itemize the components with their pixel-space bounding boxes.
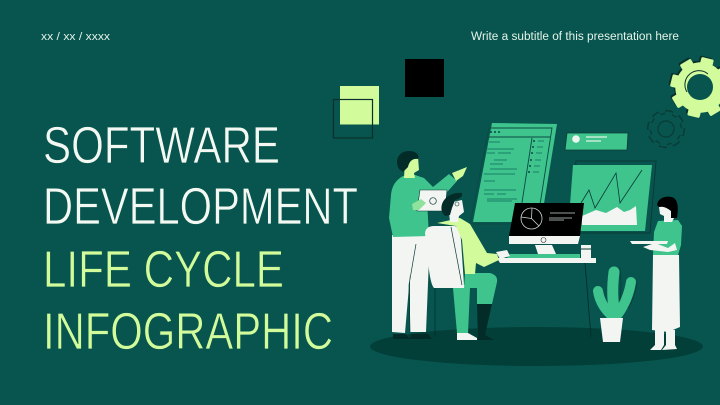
monitor [509, 203, 584, 254]
date: xx / xx / xxxx [41, 31, 111, 43]
lower leg [453, 288, 470, 333]
chart panel [568, 161, 656, 233]
title line: development: DEVELOPMENT [43, 178, 358, 236]
hair [657, 197, 678, 218]
title line: software: SOFTWARE [43, 117, 280, 175]
keyboard [507, 254, 580, 258]
monitor base [509, 236, 580, 244]
torso and arm [389, 174, 457, 237]
face [448, 200, 464, 222]
arm [643, 243, 677, 252]
title [43, 117, 358, 361]
coffee cup [581, 245, 591, 258]
hand on tablet [412, 199, 426, 210]
decorative black square [405, 59, 444, 97]
thigh [464, 273, 497, 304]
floor shadow [370, 327, 703, 366]
hair [397, 151, 419, 172]
monitor stand [535, 245, 556, 254]
line chart [581, 170, 642, 208]
tablet [630, 241, 668, 244]
skirt [652, 255, 680, 332]
torso and arm [437, 218, 499, 274]
chair [425, 226, 480, 337]
area chart [582, 206, 637, 225]
plant pot [600, 318, 623, 342]
black sock and shoe [477, 304, 494, 340]
hand pointing [452, 167, 467, 181]
person: woman with tablet [630, 197, 682, 350]
plant [598, 268, 637, 342]
icon: small gear [644, 107, 688, 151]
shoes [393, 334, 432, 339]
code window panel [470, 123, 557, 224]
tablet [417, 190, 447, 211]
decorative lime square with outline [334, 86, 379, 138]
sneaker [457, 333, 477, 340]
glasses [455, 202, 459, 206]
pie chart icon [521, 208, 542, 229]
status chip [565, 133, 628, 150]
title line: life cycle: LIFE CYCLE [43, 241, 284, 299]
icon: large gear [663, 50, 720, 124]
person: seated man [437, 193, 510, 340]
torso [653, 220, 682, 255]
desk [497, 245, 596, 337]
subtitle: Write a subtitle of this presentation here [471, 31, 679, 43]
hand [496, 250, 510, 259]
face and neck [659, 204, 674, 222]
person: standing man pointing [389, 151, 467, 339]
hair [441, 193, 462, 216]
monitor screen [509, 203, 584, 236]
trousers [392, 235, 430, 333]
neck and face [404, 157, 419, 178]
title line: infographic: INFOGRAPHIC [43, 303, 333, 361]
legs [650, 330, 664, 350]
